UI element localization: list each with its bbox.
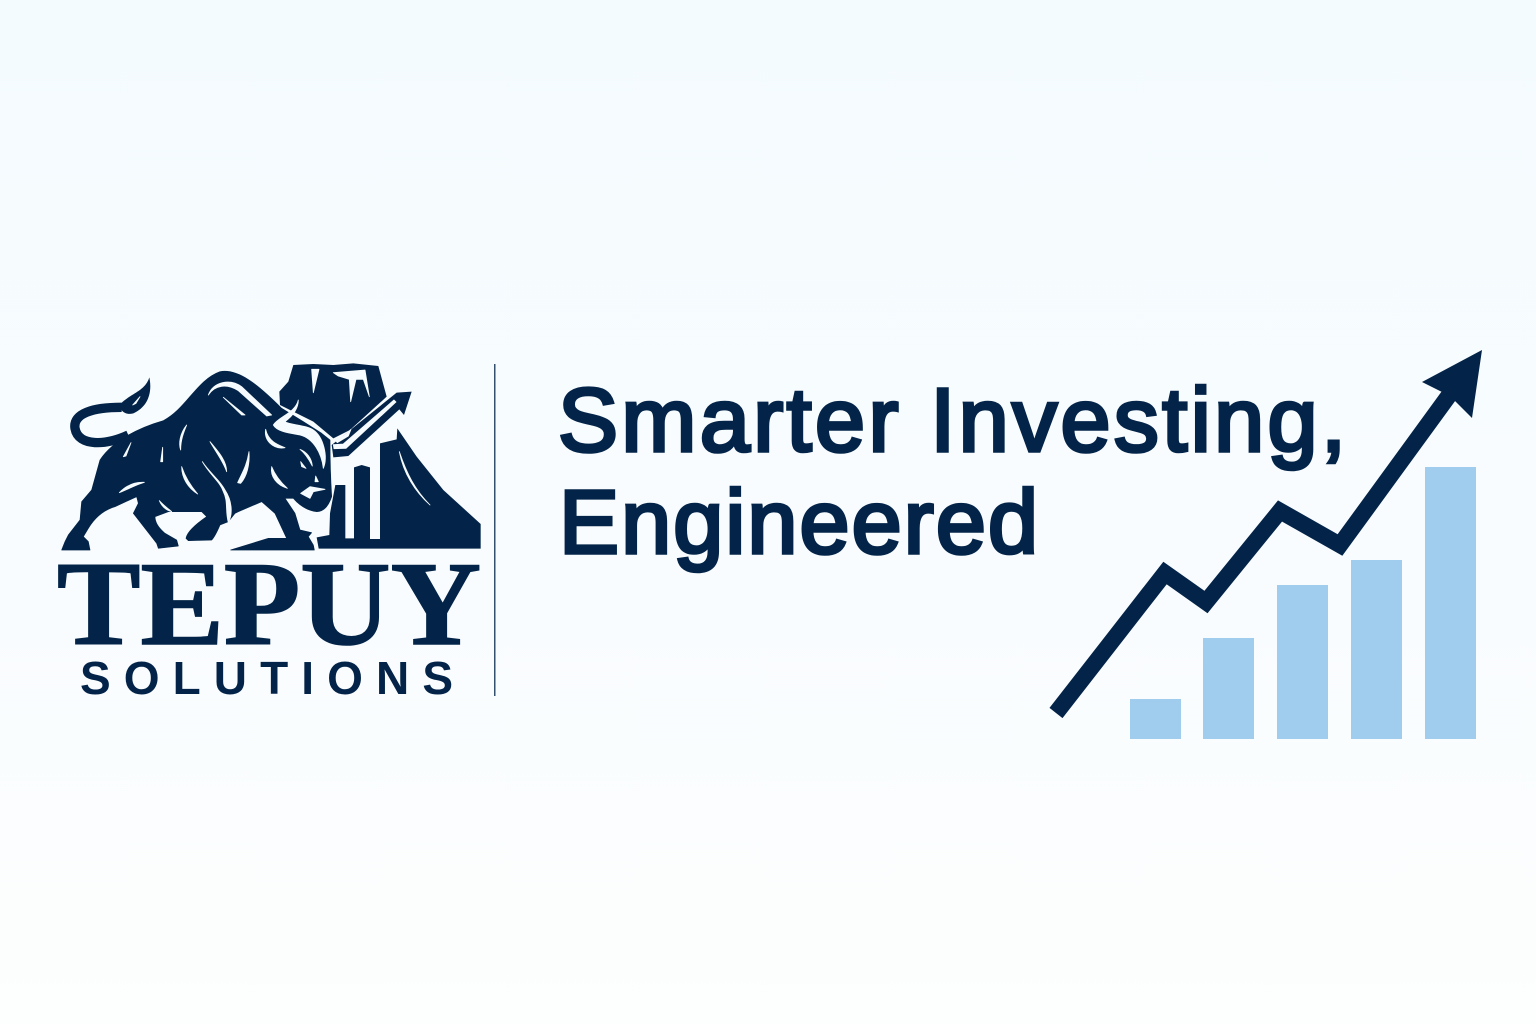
tail tuft bbox=[119, 377, 150, 414]
headline bbox=[558, 371, 1346, 573]
mountain summit rock bbox=[279, 363, 387, 438]
wordmark: SOLUTIONS: SOLUTIONS bbox=[80, 652, 453, 704]
growth chart bbox=[1056, 350, 1482, 739]
headline line 2: Engineered bbox=[559, 473, 1038, 573]
divider line bbox=[494, 364, 496, 696]
arrowhead bbox=[1422, 350, 1482, 418]
bull highlights bbox=[119, 369, 430, 523]
headline line 1: Smarter Investing, bbox=[558, 371, 1346, 471]
icon: bull with mountain and rising arrow bbox=[62, 363, 481, 550]
bar chart bbox=[1130, 467, 1476, 739]
bull body bbox=[62, 371, 332, 550]
logo: Tepuy Solutions bbox=[57, 363, 481, 704]
mountain with bars bbox=[317, 428, 481, 549]
bull tail bbox=[75, 407, 128, 443]
rising arrow on mountain bbox=[332, 392, 412, 457]
wordmark: TEPUY: TEPUY bbox=[57, 537, 481, 670]
trend line bbox=[1056, 394, 1450, 713]
